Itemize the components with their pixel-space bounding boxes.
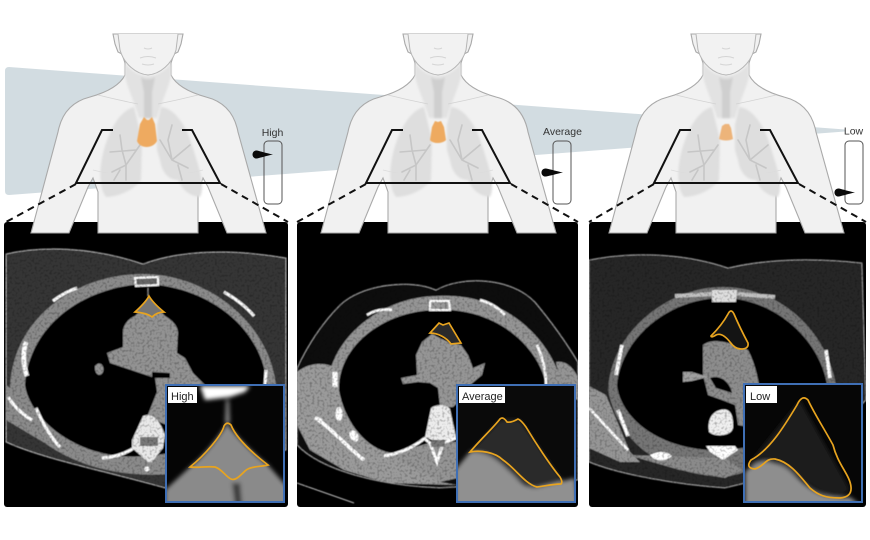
meter: high — [252, 127, 283, 204]
inset label: low: Low — [750, 391, 770, 403]
panel: low CT scan — [589, 222, 866, 507]
thymus outline: low — [711, 311, 748, 349]
inset: low — [744, 384, 862, 505]
CT: low body section — [589, 255, 866, 488]
zoom guides: dashed lines — [6, 184, 866, 222]
thymus: low — [719, 124, 733, 140]
thymus: high — [137, 117, 157, 147]
figure: low thymus person — [609, 34, 844, 233]
CT noise: high — [4, 240, 288, 490]
figure: high thymus person — [31, 34, 266, 233]
thymus inset outline: average — [470, 418, 562, 487]
thymus: average — [430, 121, 446, 143]
panel: average CT scan — [297, 222, 578, 507]
inset label: average: Average — [462, 391, 503, 403]
meter: low: Low — [844, 126, 864, 138]
meter: average — [542, 126, 582, 204]
thymus inset outline: high — [190, 423, 268, 479]
thymus inset outline: low — [749, 398, 851, 498]
inset: average — [455, 385, 578, 505]
inset: high — [165, 385, 290, 505]
CT noise: average — [297, 270, 578, 490]
meter: high: High — [262, 127, 283, 139]
wedge: decreasing thymus density background — [5, 67, 845, 195]
panel: high CT scan — [4, 222, 290, 507]
meter: average: Average — [543, 126, 582, 138]
thymus outline: high — [135, 296, 164, 317]
inset label: high: High — [171, 391, 194, 403]
figure: average thymus person — [321, 34, 556, 233]
CT noise: low — [589, 250, 866, 490]
CT: high body section — [6, 249, 286, 488]
CT: average body section — [297, 281, 578, 503]
meter: low — [834, 126, 864, 204]
thymus outline: average — [430, 323, 461, 344]
